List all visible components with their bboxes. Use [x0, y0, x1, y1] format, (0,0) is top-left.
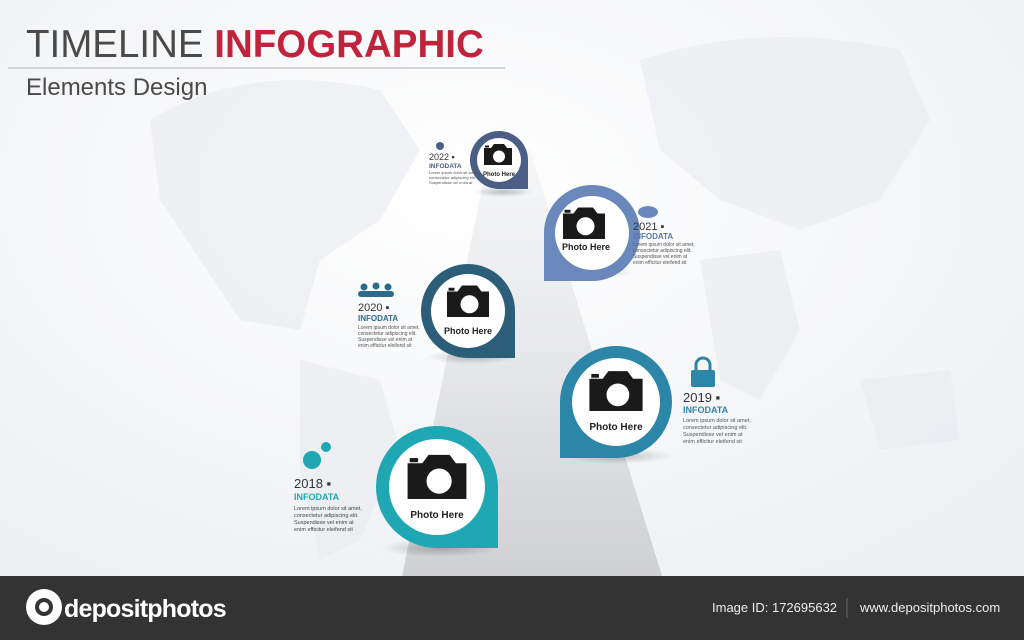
- text 2019: Suspendisse vel enim at: [683, 432, 743, 438]
- road: [402, 150, 662, 576]
- pin 2021: Photo Here: [562, 242, 610, 252]
- text 2020: Lorem ipsum dolor sit amet,: [358, 325, 420, 331]
- text 2019: enim efficitur eleifend sit: [683, 439, 742, 445]
- text 2021: [633, 206, 695, 266]
- text 2022: 2022 ▪: [429, 152, 455, 162]
- text 2018: Lorem ipsum dolor sit amet,: [294, 506, 362, 512]
- text 2022: [429, 142, 478, 185]
- pin 2022: [470, 131, 533, 197]
- text 2018: Suspendisse vel enim at: [294, 520, 354, 526]
- pin 2022: Photo Here: [483, 172, 516, 178]
- title: [8, 23, 505, 101]
- text 2021: Suspendisse vel enim at: [633, 254, 688, 260]
- pin 2020: [421, 264, 517, 364]
- text 2020: consectetur adipiscing elit.: [358, 331, 417, 337]
- text 2020: INFODATA: [358, 314, 398, 323]
- pin 2019: [560, 346, 673, 464]
- footer: Image ID: 172695632: [712, 600, 837, 615]
- pin 2019: Photo Here: [589, 422, 643, 433]
- text 2018: INFODATA: [294, 492, 340, 502]
- pin 2018: Photo Here: [410, 510, 464, 521]
- footer: depositphotos: [64, 595, 226, 623]
- text 2020: 2020 ▪: [358, 302, 390, 314]
- text 2019: INFODATA: [683, 405, 729, 415]
- text 2021: 2021 ▪: [633, 221, 665, 233]
- text 2021: enim efficitur eleifend sit: [633, 260, 687, 266]
- text 2022: consectetur adipiscing elit.: [429, 175, 476, 180]
- text 2022: INFODATA: [429, 163, 462, 170]
- text 2019: Lorem ipsum dolor sit amet,: [683, 418, 751, 424]
- text 2020: [358, 282, 420, 349]
- footer: www.depositphotos.com: [859, 600, 1000, 615]
- footer: [0, 576, 1024, 640]
- text 2021: INFODATA: [633, 232, 673, 241]
- text 2020: Suspendisse vel enim at: [358, 337, 413, 343]
- title: Elements Design: [26, 74, 207, 101]
- text 2021: consectetur adipiscing elit.: [633, 248, 692, 254]
- text 2019: consectetur adipiscing elit.: [683, 425, 748, 431]
- text 2018: [294, 442, 362, 533]
- text 2021: Lorem ipsum dolor sit amet,: [633, 242, 695, 248]
- text 2022: Suspendisse vel enim at: [429, 180, 473, 185]
- text 2019: 2019 ▪: [683, 390, 720, 405]
- world map silhouette: [150, 37, 960, 560]
- pin 2018: [376, 426, 500, 557]
- pin 2021: [543, 185, 640, 281]
- text 2019: [683, 358, 751, 445]
- text 2018: 2018 ▪: [294, 476, 331, 491]
- text 2018: consectetur adipiscing elit.: [294, 513, 359, 519]
- title: TIMELINE INFOGRAPHIC: [26, 23, 484, 66]
- pin 2020: Photo Here: [444, 326, 492, 336]
- text 2020: enim efficitur eleifend sit: [358, 343, 412, 349]
- text 2018: enim efficitur eleifend sit: [294, 527, 353, 533]
- text 2022: Lorem ipsum dolor sit amet,: [429, 170, 478, 175]
